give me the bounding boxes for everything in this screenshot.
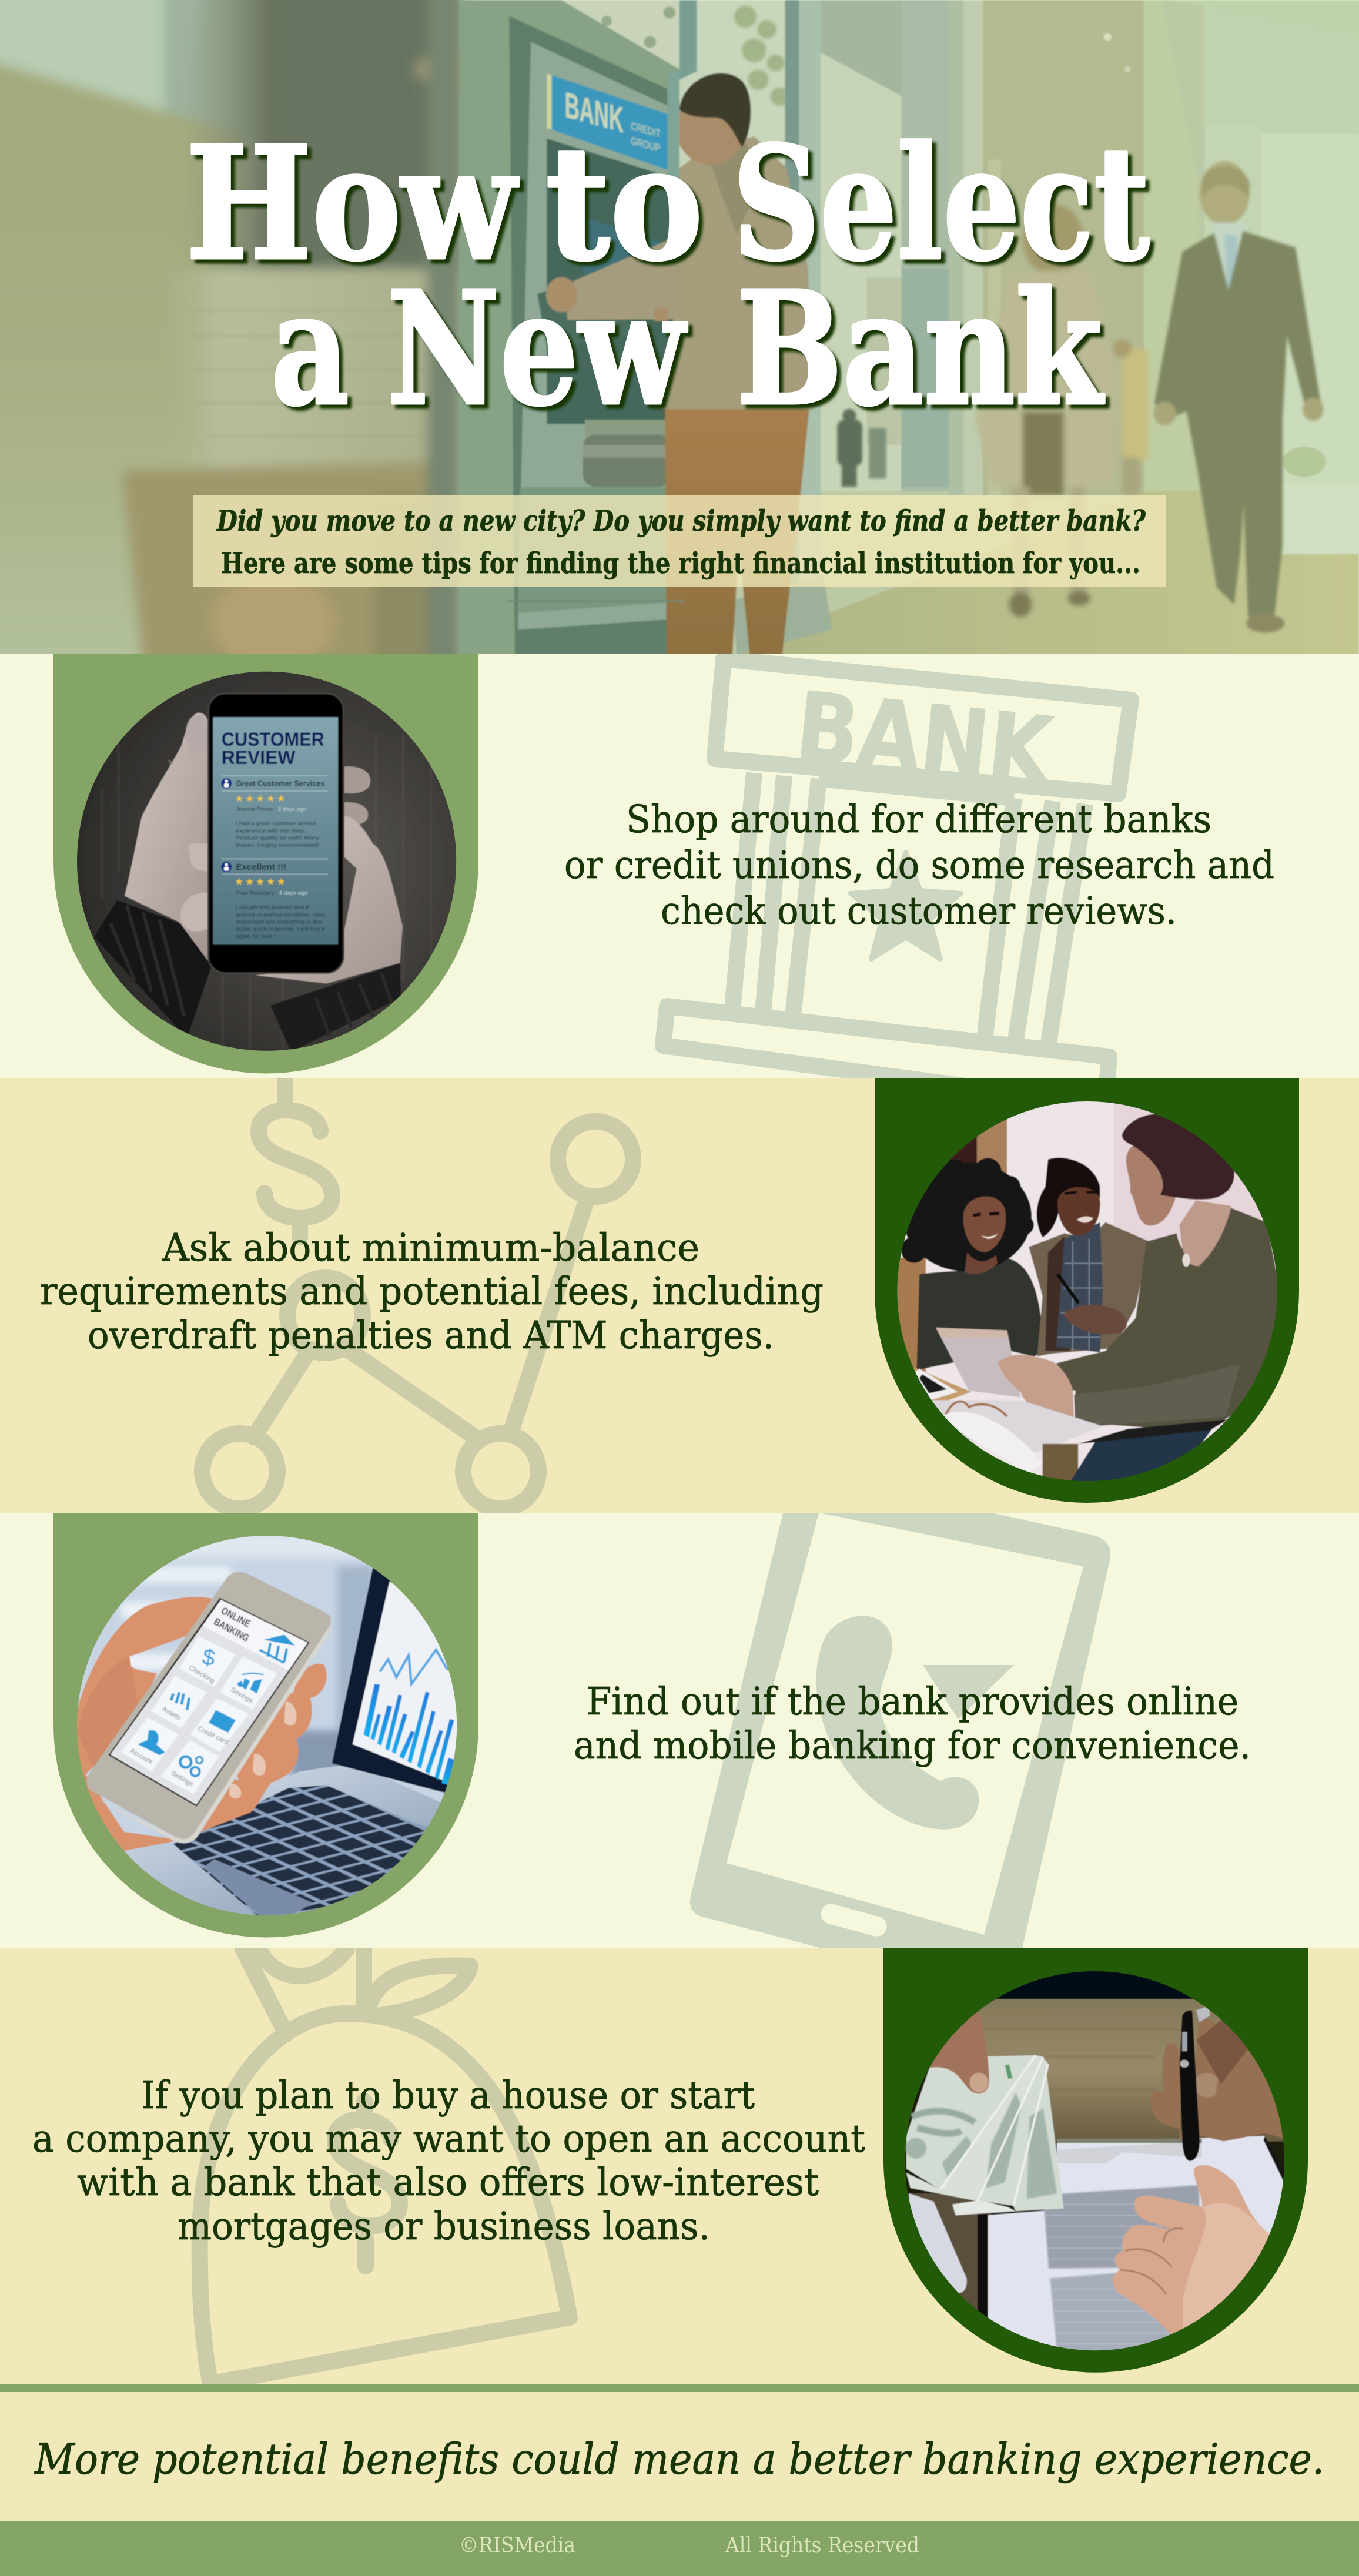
tip 1 text: check out customer reviews.	[661, 889, 1177, 933]
photo: people at a bank ATM: GROUP	[631, 135, 660, 154]
title	[186, 112, 1150, 440]
woman with curly hair	[916, 1258, 1043, 1370]
copyright: ©RISMedia	[459, 2534, 575, 2558]
title: New	[387, 257, 688, 440]
photo: people at a bank ATM: CREDIT	[631, 120, 660, 139]
title: to	[545, 112, 703, 295]
phone with review screen	[208, 694, 343, 973]
left blurred passer-by	[0, 0, 470, 654]
fan of banknotes	[906, 2055, 1036, 2189]
panel: tip 1 shop around	[0, 654, 1359, 1105]
tablet and hands	[936, 1328, 1020, 1398]
photo: customer review on phone: REVIEW	[222, 747, 296, 768]
tip 4 text: with a bank that also offers low-interest	[77, 2160, 819, 2205]
rights notice: All Rights Reserved	[725, 2534, 919, 2558]
photo: online banking app on phone over laptop	[75, 1533, 469, 1920]
bank sign	[547, 73, 672, 171]
photo: customer review on phone: super quick response. I will buy it	[236, 926, 325, 932]
clipboard and document	[986, 2136, 1287, 2352]
photo: online banking app on phone over laptop: Assets	[160, 1705, 182, 1722]
photo: people at a bank ATM	[0, 0, 1359, 672]
panel: hero banner photo and title	[0, 0, 1359, 672]
photo: online banking app on phone over laptop: $	[200, 1644, 217, 1671]
photo: online banking app on phone over laptop: Credit card	[196, 1725, 230, 1746]
title: a	[271, 257, 349, 440]
icon: bank watermark	[663, 659, 1131, 1105]
icon: mobile phone watermark	[690, 1469, 1110, 1998]
icon: money bag watermark	[200, 1949, 570, 2384]
photo: customer review on phone: Pual Brianzary : 4 days ago	[236, 890, 307, 896]
panel: tip 3 online and mobile banking	[0, 1469, 1359, 1998]
tip 2 text: overdraft penalties and ATM charges.	[88, 1314, 774, 1358]
intro question line: Did you move to a new city? Do you simply want to find a better bank?	[216, 504, 1146, 538]
right hand	[340, 766, 370, 825]
laptop screen with chart	[332, 1566, 469, 1799]
man in suit	[1153, 161, 1323, 632]
photo: online banking app on phone over laptop: Checking	[188, 1664, 216, 1685]
photo: customer review on phone: I had a great customer service	[236, 820, 316, 826]
distant pedestrians	[837, 409, 886, 487]
tip 4 text: mortgages or business loans.	[178, 2205, 710, 2249]
photo: customer review on phone: ★★★★★	[235, 794, 285, 804]
tip 3 text	[574, 1680, 1251, 1768]
ATM pillar and machine	[459, 0, 680, 654]
tab: green badge	[53, 1513, 478, 1937]
photo: customer review on phone: Excellent !!!	[236, 863, 286, 872]
person using the ATM	[665, 407, 809, 655]
tip 2 text: requirements and potential fees, including	[40, 1269, 824, 1314]
title: Bank	[737, 257, 1106, 440]
footer	[0, 2521, 1359, 2576]
photo: customer review on phone: ★★★★★	[235, 877, 285, 887]
open hand over document	[1113, 2165, 1270, 2336]
photo: customer review on phone: experience with this shop.	[236, 828, 306, 833]
ATM screen and body	[546, 138, 674, 425]
tip 1 text: or credit unions, do some research and	[564, 843, 1274, 887]
laptop base and keyboard	[121, 1763, 463, 1917]
tip 4 text	[32, 2073, 865, 2249]
title: Select	[732, 112, 1150, 295]
tip 1 text	[564, 798, 1274, 933]
hand holding phone	[75, 1597, 327, 1851]
tip 4 text: a company, you may want to open an account	[32, 2117, 865, 2161]
woman advisor	[1056, 1206, 1281, 1428]
photo: customer review on phone	[75, 669, 461, 1054]
photo: cash, pen and contract on desk	[903, 1969, 1290, 2355]
hand with pen	[1151, 2013, 1287, 2142]
man in blazer	[1029, 1222, 1149, 1356]
photo: customer review on phone: I bought this product and it	[236, 905, 309, 910]
tip 3 text: Find out if the bank provides online	[587, 1680, 1239, 1724]
photo: customer review on phone: impressed and everything is fine.	[236, 919, 324, 924]
left hand	[125, 713, 209, 964]
photo: advisor meeting with couple	[895, 1099, 1281, 1485]
photo: online banking app on phone over laptop: Account	[129, 1747, 154, 1766]
photo: online banking app on phone over laptop: BANKING	[212, 1616, 251, 1644]
icon: bank watermark: BANK	[791, 671, 1059, 808]
photo: people at a bank ATM: BANK	[565, 85, 624, 140]
photo: online banking app on phone over laptop: Settings	[170, 1769, 195, 1788]
photo: customer review on phone: Great Customer Services	[236, 780, 324, 788]
storefront glass, tree and interior	[731, 0, 1205, 654]
photo: customer review on phone: again for sure !	[236, 933, 276, 939]
desk items	[901, 1367, 972, 1406]
title: How	[186, 112, 520, 295]
tip 2 text	[40, 1226, 824, 1358]
tip 3 text: and mobile banking for convenience.	[574, 1724, 1251, 1768]
panel: tip 4 mortgages and business loans	[0, 1948, 1359, 2384]
tab: dark green badge	[883, 1948, 1308, 2373]
intro callout box	[193, 495, 1166, 587]
photo: customer review on phone: Joanna Prinze : 2 days ago	[236, 806, 306, 812]
photo: customer review on phone: arrived in perfect condition, Very	[236, 912, 326, 917]
tip 1 text: Shop around for different banks	[626, 798, 1211, 842]
woman walking	[975, 203, 1149, 617]
photo: customer review on phone: Product quality as well!! Many	[236, 835, 320, 840]
tab: green badge	[53, 654, 478, 1073]
sleeves	[94, 900, 212, 1038]
divider bar	[0, 2384, 1359, 2392]
smartphone body	[87, 1572, 331, 1839]
phone screen with app tiles	[109, 1598, 310, 1807]
icon: money network watermark	[202, 1078, 633, 1509]
photo: online banking app on phone over laptop: ONLINE	[219, 1604, 253, 1630]
photo: online banking app on phone over laptop: Savings	[229, 1686, 255, 1704]
tip 4 text: If you plan to buy a house or start	[141, 2073, 755, 2118]
intro callout box: Here are some tips for finding the right financial institution for you...	[221, 546, 1140, 580]
photo: customer review on phone: CUSTOMER	[222, 729, 324, 750]
panel: closing statement	[0, 2392, 1359, 2521]
tab: dark green badge	[875, 1078, 1299, 1503]
tip 2 text: Ask about minimum-balance	[162, 1226, 699, 1270]
photo: customer review on phone: thanks. I highly recommended!	[236, 842, 319, 848]
pavement	[737, 491, 1359, 655]
panel: tip 2 minimum balance and fees	[0, 1078, 1359, 1513]
